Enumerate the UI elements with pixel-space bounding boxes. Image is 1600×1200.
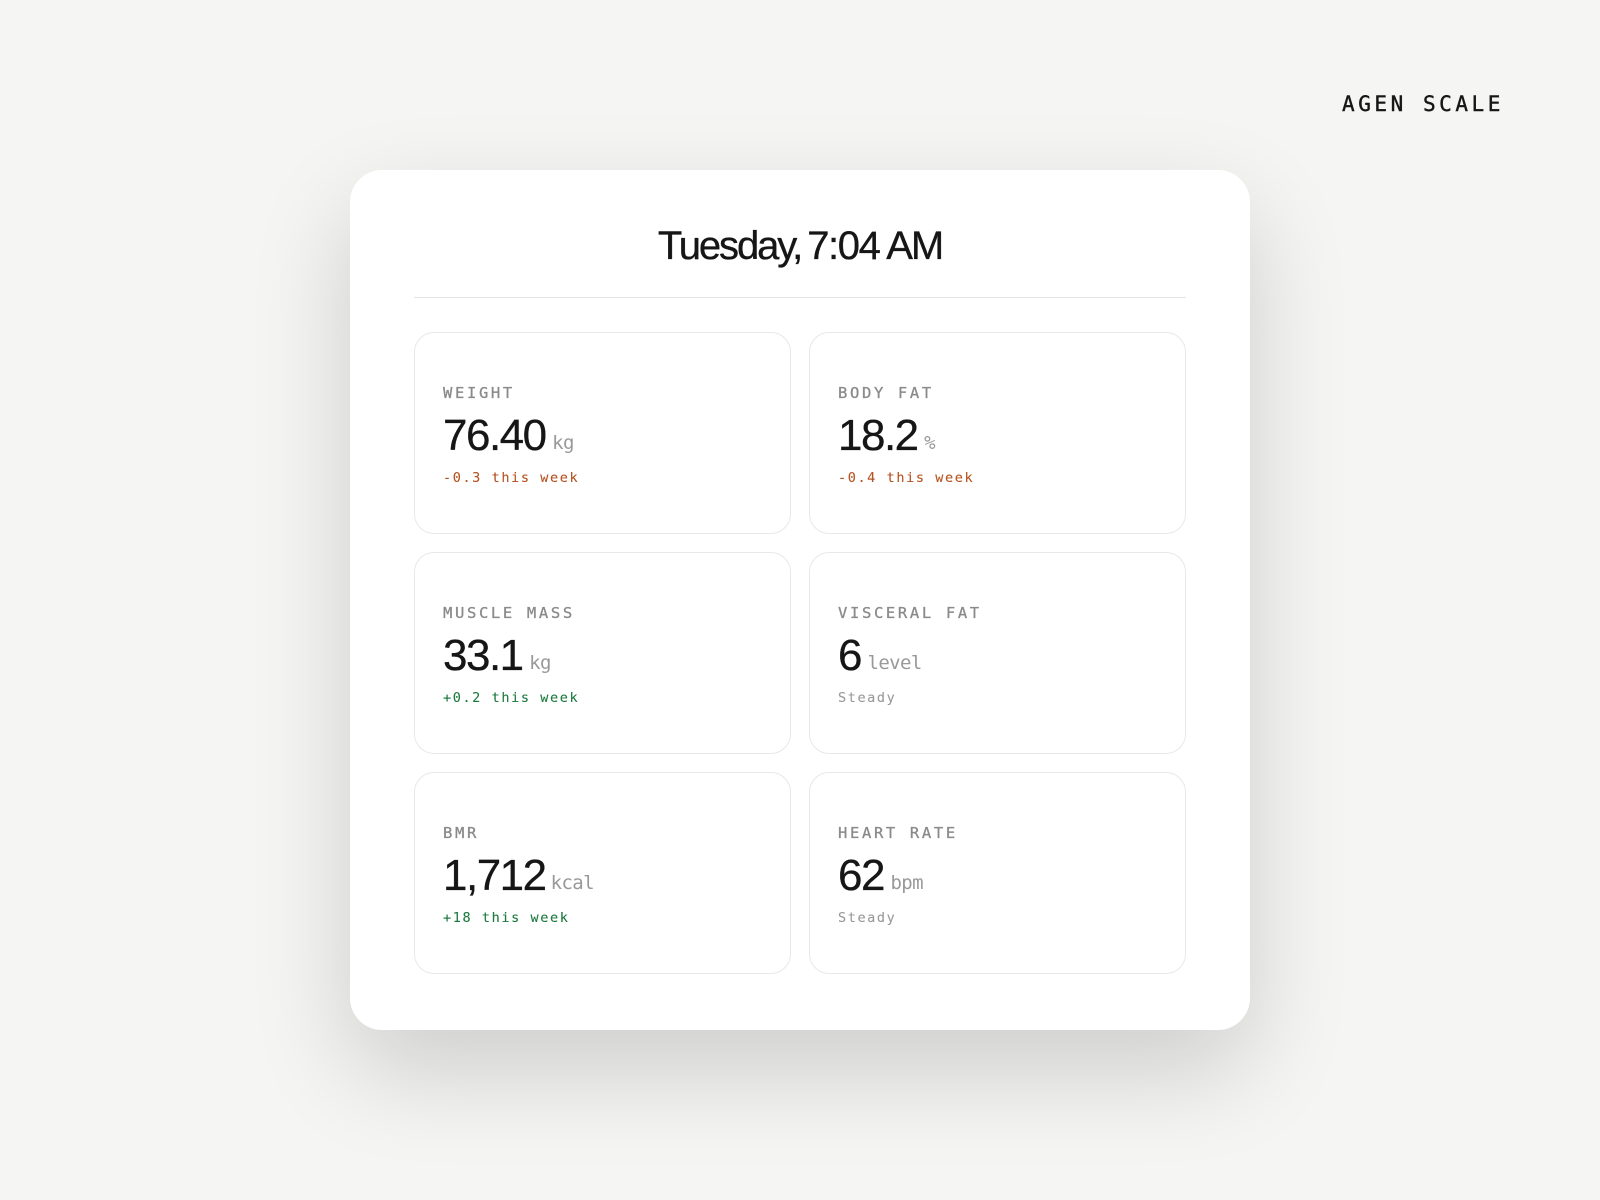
body fat change: -0.4 this week	[838, 470, 974, 486]
bmr value: 1,712 kcal	[443, 850, 594, 900]
panel: muscle mass metric	[414, 552, 791, 754]
visceral fat status: Steady	[838, 690, 896, 706]
heart rate value: 62 bpm	[838, 850, 923, 900]
visceral fat label: VISCERAL FAT	[838, 604, 982, 622]
heart rate label: HEART RATE	[838, 824, 958, 842]
panel: bmr metric	[414, 772, 791, 974]
brand label: AGEN SCALE	[1342, 92, 1504, 116]
bmr label: BMR	[443, 824, 479, 842]
panel: body fat metric	[809, 332, 1186, 534]
muscle mass value: 33.1 kg	[443, 630, 551, 680]
body fat label: BODY FAT	[838, 384, 934, 402]
panel: heart rate metric	[809, 772, 1186, 974]
weight label: WEIGHT	[443, 384, 515, 402]
visceral fat value: 6 level	[838, 630, 922, 680]
panel: main card	[350, 170, 1250, 1030]
title: Tuesday, 7:04 AM	[658, 224, 942, 268]
heart rate status: Steady	[838, 910, 896, 926]
bmr change: +18 this week	[443, 910, 569, 926]
body fat value: 18.2 %	[838, 410, 935, 460]
panel: visceral fat metric	[809, 552, 1186, 754]
weight change: -0.3 this week	[443, 470, 579, 486]
weight value: 76.40 kg	[443, 410, 574, 460]
muscle mass change: +0.2 this week	[443, 690, 579, 706]
panel: weight metric	[414, 332, 791, 534]
muscle mass label: MUSCLE MASS	[443, 604, 575, 622]
